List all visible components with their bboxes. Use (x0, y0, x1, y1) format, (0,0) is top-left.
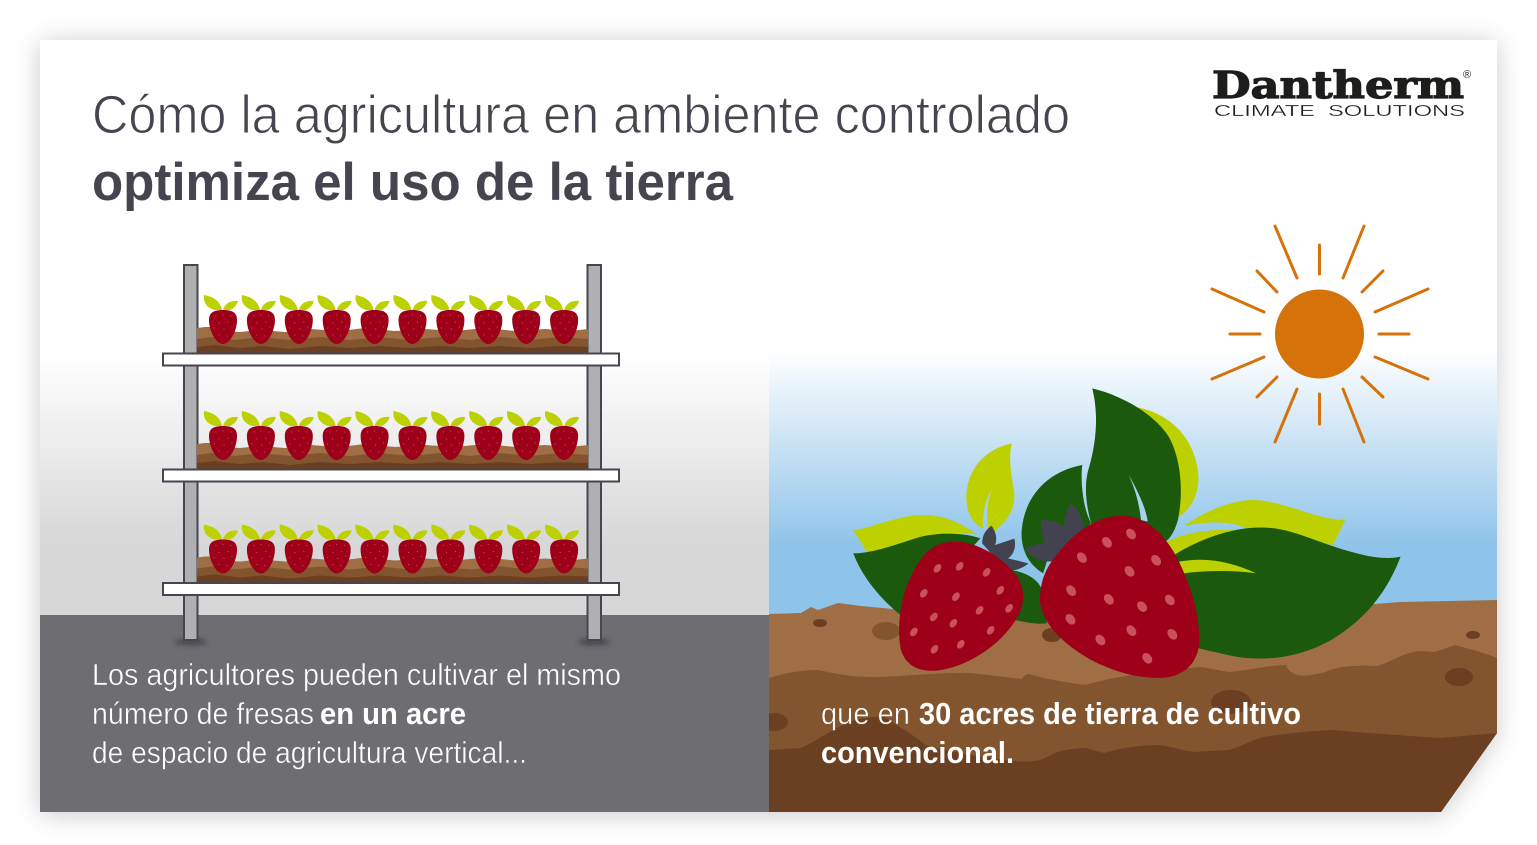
title (92, 85, 1070, 212)
panel: sky lower (769, 545, 1497, 614)
panel: indoor wall background (40, 393, 769, 545)
logo tagline: solutions: SOLUTIONS (1328, 103, 1465, 120)
text: conventional farming (821, 696, 1301, 770)
shelving unit (163, 265, 619, 646)
logo tagline: climate: CLIMATE (1214, 103, 1315, 120)
logo wordmark: Dantherm (1212, 63, 1464, 107)
shelf board 1 (163, 354, 619, 366)
dark green leaves (853, 388, 1401, 659)
panel: indoor wall lower (40, 545, 769, 615)
right post (588, 265, 601, 640)
left post (184, 265, 198, 640)
sepals (982, 503, 1084, 571)
line 2 bold: convencional. (821, 735, 1014, 770)
soil: top layer (769, 600, 1497, 812)
left strawberry (899, 542, 1023, 671)
line 1 light: que en (821, 696, 910, 731)
lime leaf highlight (1179, 560, 1256, 573)
panel: sky gradient (769, 350, 1497, 545)
post shadows (175, 638, 610, 646)
soil: middle layer (769, 645, 1497, 812)
line 1 bold: 30 acres de tierra de cultivo (919, 696, 1301, 731)
title line 1: Cómo la agricultura en ambiente controlado (92, 85, 1070, 145)
lime leaves behind (853, 407, 1345, 555)
logo: Dantherm (1212, 63, 1471, 120)
shelf 1 crops (197, 295, 588, 353)
text: vertical farming (92, 657, 621, 770)
line 2 light: número de fresas (92, 696, 314, 731)
line 1: Los agricultores pueden cultivar el mismo (92, 657, 621, 692)
title line 2: optimiza el uso de la tierra (92, 153, 733, 212)
icon: sun (1212, 226, 1428, 442)
soil: deep layer (769, 717, 1497, 812)
logo registered mark: ® (1463, 69, 1471, 81)
shelf 2 crops (197, 411, 588, 469)
panel: indoor floor (40, 615, 769, 812)
illustration: large strawberries and leaves (853, 388, 1401, 678)
large strawberry (1040, 516, 1199, 678)
line 3: de espacio de agricultura vertical... (92, 735, 527, 770)
line 2 bold: en un acre (320, 696, 466, 731)
shelf 3 crops (197, 524, 588, 582)
shelf board 2 (163, 470, 619, 482)
shelf board 3 (163, 583, 619, 595)
soil: stones (760, 619, 1480, 731)
leaf vein (1129, 475, 1148, 522)
